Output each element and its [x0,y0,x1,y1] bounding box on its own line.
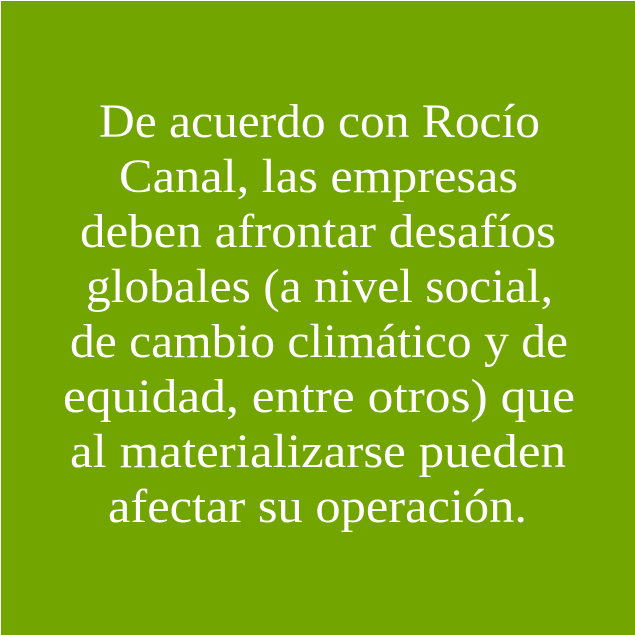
text block: quote: afectar su operación. [108,480,527,533]
text block: quote: de cambio climático y de [70,315,568,368]
text block: quote: Canal, las empresas [119,150,518,203]
text block: quote: De acuerdo con Rocío [99,95,540,148]
text block: quote: al materializarse pueden [70,425,566,478]
text block: quote: deben afrontar desafíos [80,205,556,258]
text block: quote: equidad, entre otros) que [63,370,575,423]
text block: quote: globales (a nivel social, [86,260,553,313]
